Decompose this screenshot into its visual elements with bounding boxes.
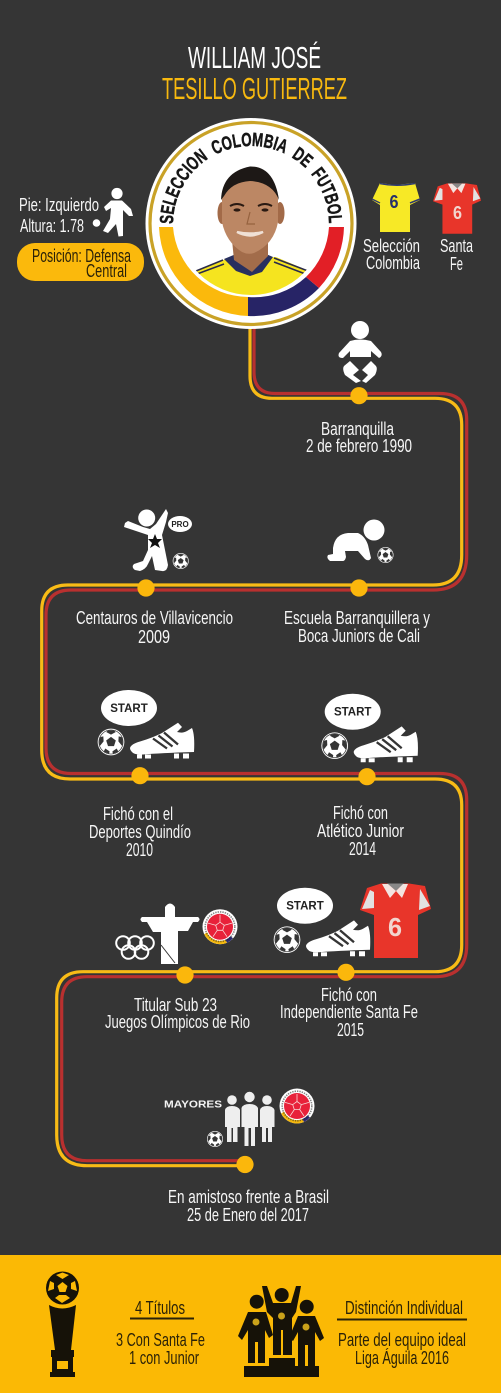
jersey labels: Fe (450, 253, 463, 274)
icon: Colombia federation badge (202, 909, 238, 944)
tricolor arc (159, 227, 344, 316)
player photo (196, 166, 307, 295)
icon: Christ statue and olympic rings (116, 904, 200, 964)
icon: start boot, Santa Fe: START (286, 901, 324, 913)
position pill: Central (86, 260, 127, 281)
text: Titular Sub 23: Titular Sub 23 (134, 994, 217, 1015)
text: Escuela Barranquillera (284, 607, 431, 646)
icon: Santa Fe jersey: 6 (453, 203, 462, 223)
text: Barranquilla: 2 de febrero 1990 (306, 435, 412, 456)
text: Independiente Santa Fe: Independiente Santa Fe (280, 1001, 418, 1022)
jersey labels: Selección (363, 235, 420, 256)
text: titles: 3 Con Santa Fe (116, 1329, 205, 1350)
badge portrait (146, 118, 356, 329)
timeline path (42, 320, 467, 1166)
icon: start boot, Atletico Junior (320, 694, 418, 762)
text: Barranquilla: Barranquilla (321, 418, 395, 439)
text: Atletico Junior (317, 802, 404, 859)
icon: start boot, Santa Fe (273, 888, 370, 956)
footer panel (0, 1255, 501, 1393)
text: Independiente Santa Fe: Fichó con (321, 984, 377, 1005)
player info: foot and height (19, 194, 99, 236)
text: Titular Sub 23 (105, 994, 250, 1032)
icon: start boot, Deportes Quindio (97, 690, 194, 758)
circular lettering: SELECCION COLOMBIA DE FUTBOL (160, 132, 342, 224)
text: Deportes Quindio (89, 803, 191, 860)
icon: medal podium (238, 1286, 324, 1377)
position pill: Posición: Defensa (32, 245, 131, 266)
text: Centauros de Villavicencio: Centauros de Villavicencio (76, 607, 233, 628)
text: Centauros de Villavicencio: 2009 (138, 626, 170, 647)
icon: Colombia jersey: 6 (390, 192, 398, 212)
icon: start boot, Atletico Junior: START (334, 707, 371, 719)
icon: Santa Fe big jersey: 6 (388, 912, 402, 942)
jersey labels: Santa (440, 235, 473, 256)
timeline dots (131, 387, 376, 1173)
title: TESILLO GUTIERREZ (162, 72, 347, 106)
text: Atletico Junior: 2014 (349, 838, 376, 859)
text: titles: 1 con Junior (129, 1347, 199, 1368)
icon: start boot, Deportes Quindio: START (110, 703, 148, 715)
player info: foot and height: Pie: Izquierdo (19, 194, 99, 215)
icon: player kicking (93, 188, 133, 236)
text: Escuela Barranquillera: Boca Juniors de Cali (298, 625, 420, 646)
icon: baby (338, 321, 382, 383)
text: titles (116, 1297, 205, 1368)
icon: Santa Fe jersey (433, 183, 481, 234)
text: Escuela Barranquillera: Escuela Barranquillera y (284, 607, 431, 628)
text: Titular Sub 23: Juegos Olímpicos de Rio (105, 1011, 250, 1032)
text: Deportes Quindio: 2010 (126, 839, 153, 860)
icon: crawling child (327, 520, 394, 564)
jersey labels: Colombia (366, 252, 420, 273)
text: Barranquilla (306, 418, 412, 456)
title: WILLIAM JOSÉ (188, 40, 321, 75)
text: individual distinction (337, 1297, 467, 1368)
title (162, 40, 347, 106)
text: En amistoso frente a Brasil: 25 de Enero del 2017 (187, 1204, 309, 1225)
text: En amistoso frente a Brasil (168, 1186, 329, 1225)
text: Deportes Quindio: Fichó con el (103, 803, 173, 824)
text: Independiente Santa Fe: 2015 (337, 1019, 364, 1040)
position pill (17, 243, 144, 281)
icon: Colombia federation badge seniors (280, 1088, 314, 1124)
icon: pro player: PRO (171, 520, 189, 529)
icon: Colombia jersey (372, 183, 420, 232)
text: Centauros de Villavicencio (76, 607, 233, 647)
icon: pro player (124, 509, 192, 571)
text: Atletico Junior: Fichó con (333, 802, 388, 823)
text: En amistoso frente a Brasil: En amistoso frente a Brasil (168, 1186, 329, 1207)
player info: foot and height: Altura: 1.78 (20, 215, 84, 236)
text: Deportes Quindio: Deportes Quindío (89, 821, 191, 842)
icon: Santa Fe big jersey (360, 884, 431, 958)
jersey labels (363, 235, 473, 274)
icon: national team seniors: MAYORES (164, 1098, 222, 1110)
text: Independiente Santa Fe (280, 984, 418, 1040)
icon: national team seniors (164, 1092, 274, 1148)
text: Atletico Junior: Atlético Junior (317, 820, 404, 841)
icon: trophy (46, 1272, 79, 1377)
text: titles: 4 Títulos (135, 1297, 185, 1318)
text: individual distinction: Liga Águila 2016 (355, 1347, 449, 1368)
